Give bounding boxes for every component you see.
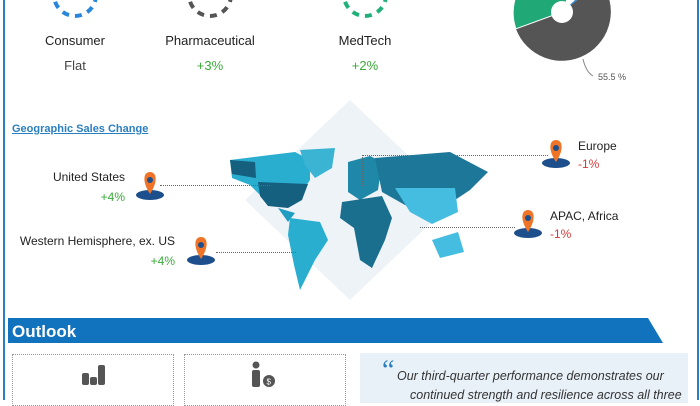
map — [230, 100, 488, 300]
donut chart: 55.5 % — [598, 72, 626, 82]
connector WH — [216, 252, 296, 253]
icon: pin WH — [187, 237, 215, 265]
connector apac — [420, 227, 515, 228]
callout: europe — [578, 139, 617, 171]
callout: united states: +4% — [101, 190, 125, 204]
segment: medtech: MedTech — [339, 33, 391, 48]
segment: consumer: Consumer — [45, 33, 105, 48]
icon: person dollar: $ — [266, 378, 272, 386]
callout: apac: APAC, Africa — [550, 209, 618, 223]
icon: pharma ring — [188, 0, 232, 18]
segment: medtech — [339, 33, 391, 73]
icon: pin europe — [542, 140, 570, 168]
callout: europe: Europe — [578, 139, 617, 153]
heading: geographic: Geographic Sales Change — [12, 123, 148, 135]
icon: pin US — [136, 172, 164, 200]
callout: western hemisphere — [20, 234, 175, 268]
connector US — [160, 185, 270, 186]
quote box: Our third-quarter performance demonstrates our — [397, 369, 664, 383]
callout: apac: -1% — [550, 227, 571, 241]
outlook box 2 — [184, 354, 346, 406]
icon: pin apac — [514, 210, 542, 238]
segment: medtech: +2% — [352, 58, 378, 73]
outlook banner: Outlook — [12, 322, 77, 341]
connector europe — [362, 155, 548, 186]
callout: united states: United States — [53, 170, 125, 184]
callout: europe: -1% — [578, 157, 599, 171]
segment: pharmaceutical: Pharmaceutical — [165, 33, 255, 48]
callout: western hemisphere: Western Hemisphere, ex. US — [20, 234, 175, 248]
quote box — [360, 353, 688, 403]
segment: consumer — [45, 33, 105, 73]
quote box: “ — [382, 355, 394, 386]
quote box: continued strength and resilience across all three — [410, 388, 682, 402]
callout: united states — [53, 170, 125, 204]
segment: pharmaceutical: +3% — [197, 58, 223, 73]
donut chart — [514, 0, 626, 82]
callout: western hemisphere: +4% — [151, 254, 175, 268]
segment: consumer: Flat — [64, 58, 86, 73]
outlook box 1 — [12, 354, 174, 406]
icon: consumer ring — [53, 0, 98, 18]
segment: pharmaceutical — [165, 33, 255, 73]
icon: medtech ring — [343, 0, 388, 18]
icon: coins — [82, 365, 105, 385]
callout: apac — [550, 209, 618, 241]
icon: person dollar — [252, 362, 275, 387]
outlook banner — [8, 318, 663, 343]
